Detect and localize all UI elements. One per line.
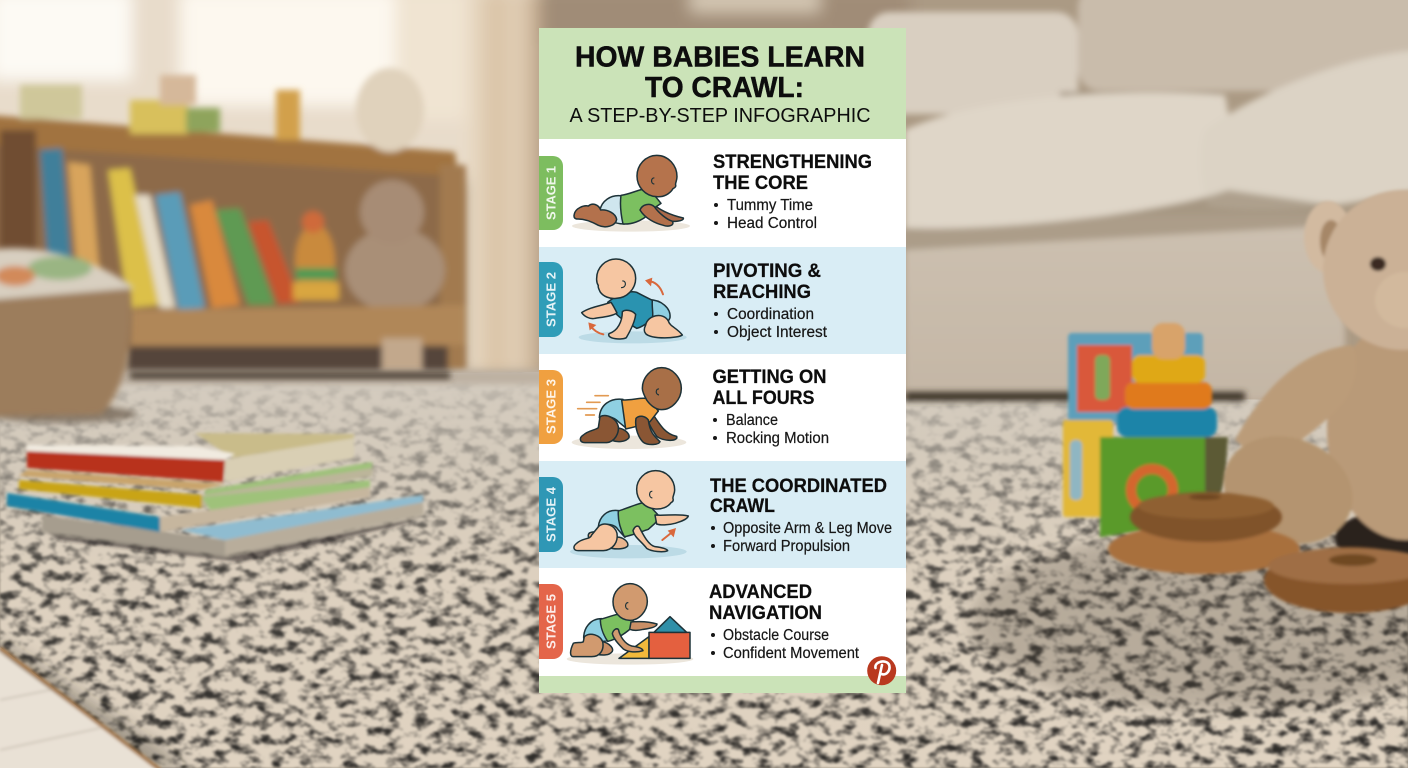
background: pale wood floor (0, 648, 162, 768)
text: getting on all fours (712, 366, 829, 447)
background: wooden rings (1108, 492, 1408, 613)
text: strengthening the core: STRENGTHENING (713, 151, 872, 173)
text: pivoting and reaching: Coordination (727, 306, 814, 323)
text: advanced navigation: NAVIGATION (709, 602, 822, 624)
icon: pinterest badge (867, 656, 896, 685)
panel: stage 3 (539, 354, 906, 461)
text: getting on all fours: ALL FOURS (712, 387, 814, 409)
icon: baby on tummy (572, 155, 690, 232)
title panel (539, 28, 906, 139)
text: getting on all fours: Rocking Motion (726, 430, 829, 447)
text: the coordinated crawl: THE COORDINATED (710, 475, 887, 497)
stage 4 tab: STAGE 4 (544, 486, 558, 542)
text: pivoting and reaching (713, 260, 828, 341)
footer band (539, 676, 906, 693)
stage 2 tab: STAGE 2 (544, 272, 558, 327)
background: bookshelf with books and toys (0, 68, 466, 382)
text: the coordinated crawl: Forward Propulsion (723, 538, 850, 555)
panel: stage 5 (539, 568, 906, 676)
text: advanced navigation (709, 581, 860, 662)
stage 1 tab: STAGE 1 (544, 166, 558, 220)
text: the coordinated crawl: CRAWL (710, 495, 775, 517)
icon: baby pivoting and reaching (579, 259, 687, 343)
background: stacked books on rug (7, 433, 425, 562)
panel: stage 1 (539, 139, 906, 247)
panel: stage 4 (539, 461, 906, 568)
text: advanced navigation: ADVANCED (709, 581, 812, 603)
background: woven basket and blanket (0, 248, 136, 423)
text: strengthening the core (713, 151, 872, 232)
stage 2 tab (539, 262, 563, 337)
text: getting on all fours: Balance (726, 412, 778, 429)
stage 4 tab (539, 477, 563, 552)
stage 5 tab: STAGE 5 (544, 594, 558, 649)
background: teddy bear (1208, 190, 1408, 566)
background: colorful toy blocks and stacking rings (1063, 323, 1228, 537)
stage 3 tab: STAGE 3 (544, 379, 558, 434)
stage 5 tab (539, 584, 563, 659)
panel: stage 2 (539, 247, 906, 354)
text: strengthening the core: Tummy Time (727, 197, 813, 214)
stage 3 tab (539, 370, 563, 444)
background: room wall and window (0, 0, 1408, 400)
text: strengthening the core: Head Control (727, 215, 817, 232)
text: the coordinated crawl (710, 475, 892, 555)
text: pivoting and reaching: REACHING (713, 281, 811, 303)
title panel: TO CRAWL: (645, 72, 804, 104)
icon: baby crawling with opposite arm and leg (570, 471, 688, 558)
text: advanced navigation: Obstacle Course (723, 627, 829, 644)
text: advanced navigation: Confident Movement (723, 645, 860, 662)
text: getting on all fours: GETTING ON (712, 366, 826, 388)
icon: baby on all fours (572, 368, 686, 449)
background: speckled wool rug (0, 370, 1408, 768)
icon: baby navigating around blocks (567, 584, 693, 665)
text: pivoting and reaching: PIVOTING & (713, 260, 821, 282)
infographic card (539, 28, 906, 693)
text: pivoting and reaching: Object Interest (727, 324, 828, 341)
stage 1 tab (539, 156, 563, 230)
background: beige sofa (868, 0, 1408, 400)
text: strengthening the core: THE CORE (713, 172, 808, 194)
text: the coordinated crawl: Opposite Arm & Leg Move (723, 520, 892, 537)
title: HOW BABIES LEARN (575, 42, 865, 74)
subtitle: A STEP-BY-STEP INFOGRAPHIC (570, 104, 871, 127)
